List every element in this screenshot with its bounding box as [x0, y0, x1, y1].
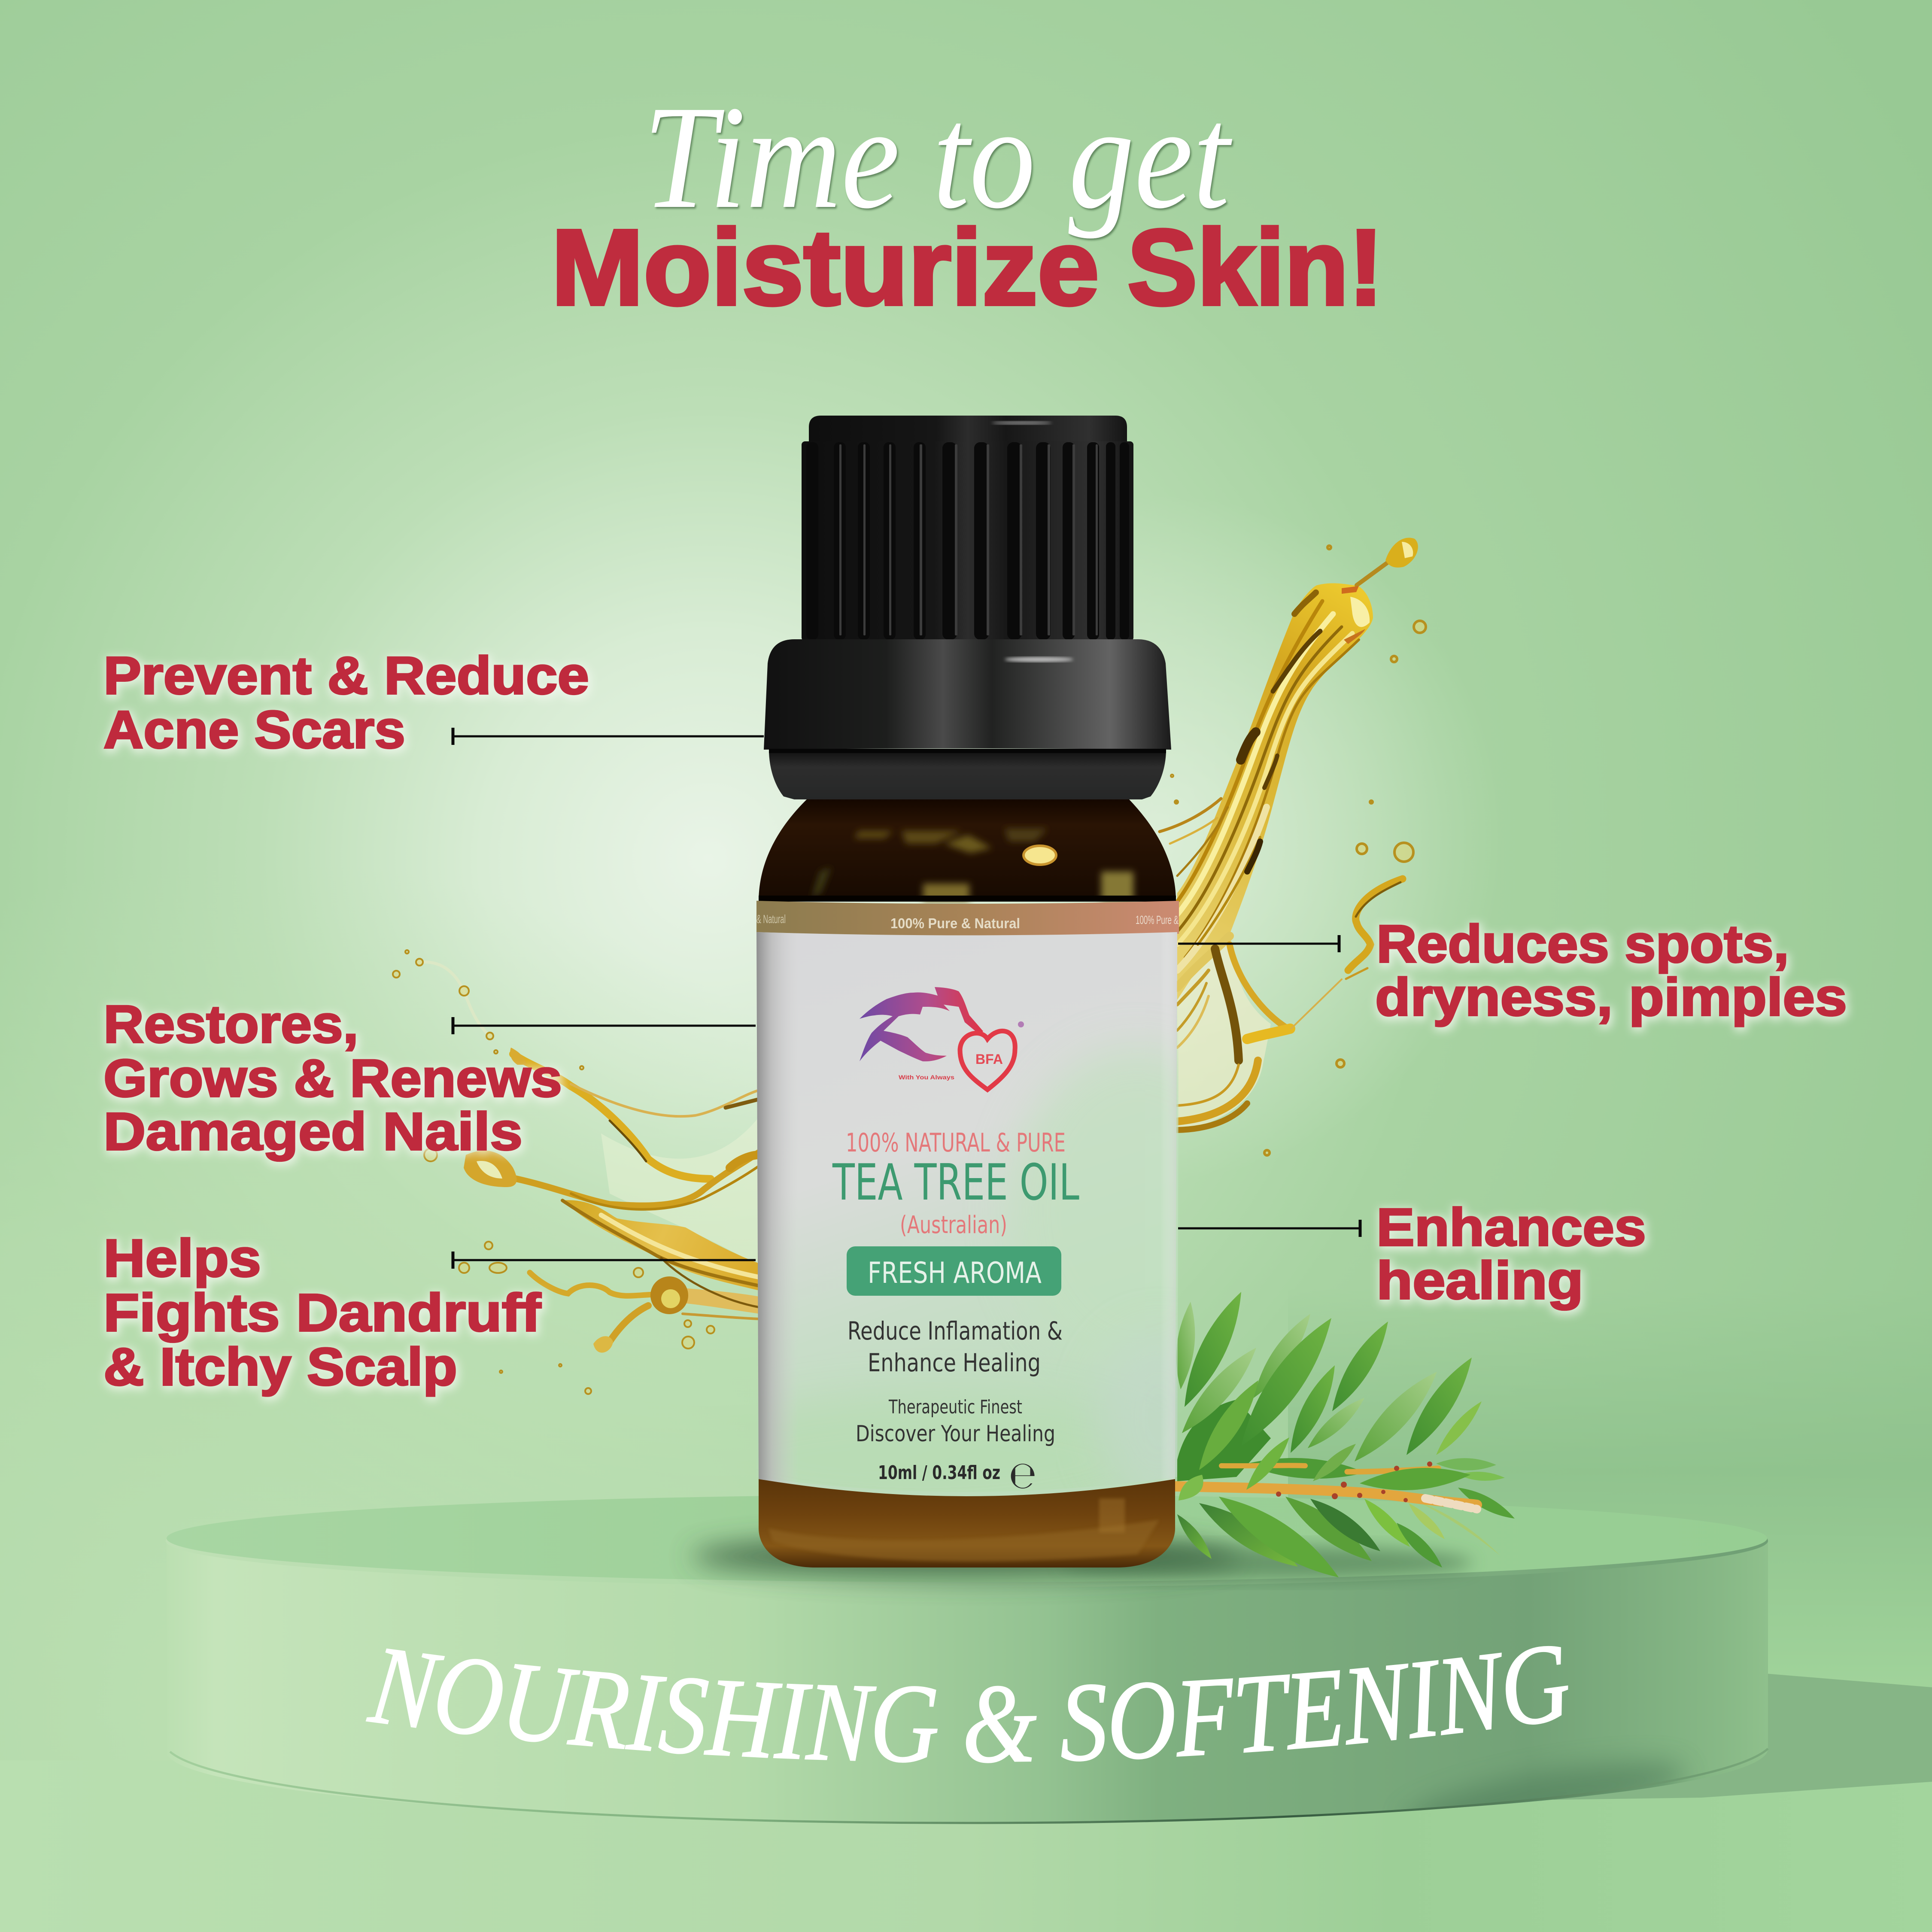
label copy: FRESH AROMA: [868, 1256, 1042, 1290]
label copy: Therapeutic Finest: [888, 1396, 1022, 1418]
brand logo: With You Always: [899, 1074, 954, 1081]
logo heart: [960, 1031, 1015, 1090]
stems: [1175, 1465, 1477, 1509]
collar highlight: [1005, 657, 1073, 662]
fresh aroma pill: [847, 1246, 1061, 1296]
title line 1: Time to get: [643, 75, 1234, 239]
head of splash: [1342, 586, 1359, 594]
title line 2: Skin!: [1127, 207, 1383, 327]
lower cap ring: [769, 750, 1166, 799]
glass shoulder: [759, 799, 1176, 902]
callout: enhances healing: Enhances: [1376, 1198, 1646, 1257]
strands: [419, 962, 759, 1342]
glass bright spot: [1024, 846, 1056, 865]
label copy: Discover Your Healing: [856, 1421, 1055, 1447]
oil drops: [393, 950, 714, 1394]
curved slogan: NOURISHING & SOFTENING: [362, 1619, 1577, 1786]
leaves upper: [1176, 1292, 1515, 1519]
top drop: [1385, 538, 1418, 568]
callout: prevent and reduce acne scars: Prevent & Reduce: [103, 646, 589, 705]
logo wing: [860, 987, 983, 1061]
glass reflections: [812, 829, 1133, 902]
podium side shading: [1412, 1754, 1686, 1808]
callout: restores nails: Damaged Nails: [103, 1102, 522, 1161]
callout: enhances healing: [1376, 1198, 1646, 1310]
callout: reduces spots: [1375, 914, 1847, 1027]
strands: [1160, 562, 1389, 1130]
podium top: [167, 1495, 1767, 1582]
label band: 100% Pure &: [1136, 913, 1179, 927]
oil drops: [1171, 546, 1426, 1155]
pale fill between strands: [601, 1116, 759, 1267]
podium rim: [166, 1495, 1768, 1587]
label paper: [683, 932, 1267, 1524]
title: [551, 75, 1383, 327]
small splash branch: [1346, 879, 1403, 979]
callout: restores nails: [103, 995, 562, 1161]
label copy: [832, 1128, 1079, 1497]
cap knurled body: [802, 441, 1133, 641]
oil splash left: [393, 950, 759, 1394]
brand logo: [860, 987, 1024, 1090]
shadow under bottle and sprig: [691, 1535, 1473, 1580]
wide oil band: [562, 1200, 759, 1291]
label copy: 100% NATURAL & PURE: [846, 1128, 1066, 1158]
podium base edge: [170, 1749, 1768, 1823]
label copy: Reduce Inflamation &: [848, 1316, 1063, 1346]
label copy: (Australian): [900, 1211, 1007, 1239]
label copy: 10ml / 0.34fl oz: [878, 1462, 1000, 1484]
callout: prevent and reduce acne scars: Acne Scars: [103, 700, 405, 759]
bottle: [756, 416, 1179, 1567]
callout: dandruff: [103, 1229, 541, 1397]
label copy: TEA TREE OIL: [832, 1154, 1079, 1212]
callout: dandruff: Fights Dandruff: [103, 1283, 541, 1343]
tea tree sprig: [1175, 1292, 1515, 1577]
callout: restores nails: Restores,: [103, 995, 358, 1054]
callout: prevent and reduce acne scars: [103, 646, 589, 759]
podium: [166, 1495, 1768, 1844]
callout: enhances healing: healing: [1376, 1251, 1583, 1310]
splash body: [1177, 583, 1373, 1000]
lower oil band: [683, 1288, 759, 1314]
dense leaf base: [1177, 1400, 1271, 1481]
label band: 100% Pure & Natural: [890, 915, 1020, 931]
leaves lower: [1177, 1497, 1500, 1577]
label band: & Natural: [756, 912, 786, 926]
oil splash right: [1160, 538, 1426, 1155]
pale gap inside splash: [1177, 940, 1271, 1131]
title line 2: Moisturize: [551, 207, 1099, 327]
callout: dandruff: & Itchy Scalp: [103, 1337, 457, 1397]
cap top: [809, 416, 1127, 442]
label copy: ℮: [1009, 1453, 1036, 1497]
brand logo: BFA: [975, 1051, 1003, 1067]
leaves over stem: [1179, 1437, 1470, 1501]
title line 2: [551, 207, 1383, 327]
callout: dandruff: Helps: [103, 1229, 261, 1288]
label band: [756, 901, 1179, 936]
callout: reduces spots: dryness, pimples: [1375, 968, 1847, 1027]
callout: restores nails: Grows & Renews: [103, 1049, 562, 1108]
leader lines: [452, 728, 1360, 1269]
knots and drops: [464, 1151, 516, 1187]
stem nodes: [1276, 1461, 1432, 1502]
callout: reduces spots: Reduces spots,: [1376, 914, 1789, 974]
cap collar: [764, 639, 1171, 750]
podium side: [167, 1538, 1768, 1823]
label copy: Enhance Healing: [868, 1348, 1041, 1377]
base of bottle: [759, 1460, 1175, 1567]
